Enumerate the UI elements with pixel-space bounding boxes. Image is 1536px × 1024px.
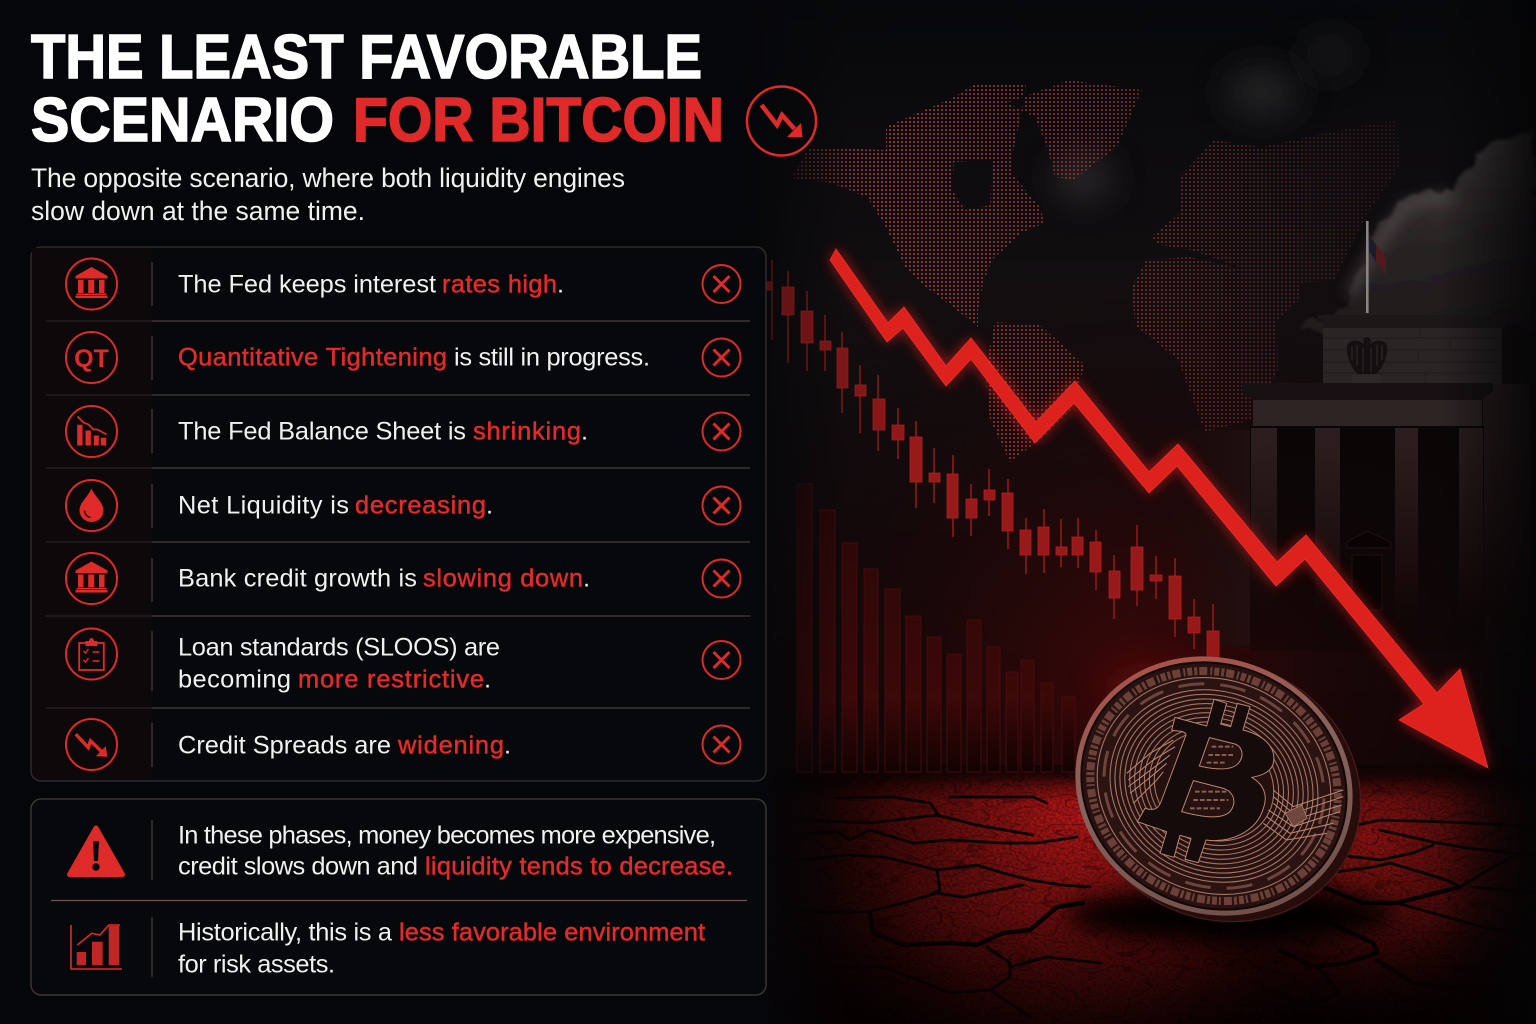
icon: title downward arrow xyxy=(747,86,816,156)
row: quantitative tightening: Quantitative Tightening xyxy=(178,344,447,372)
title line 2 white: SCENARIO xyxy=(31,86,334,155)
coin edge xyxy=(1038,615,1404,967)
row: credit spreads xyxy=(66,719,740,770)
coin shadow and glow xyxy=(1065,662,1395,943)
row: bank credit: slowing down xyxy=(423,564,583,592)
subtitle: slow down at the same time. xyxy=(31,196,365,226)
row: net liquidity: Net Liquidity is xyxy=(178,492,349,520)
title line 2 red: FOR BITCOIN xyxy=(353,86,724,155)
row: balance sheet: shrinking xyxy=(473,418,581,446)
note: money more expensive: In these phases, money becomes more expensive, xyxy=(178,822,716,850)
upper block xyxy=(1323,328,1502,384)
icon: bank xyxy=(66,258,117,310)
federal reserve building xyxy=(1170,221,1530,651)
bitcoin coin xyxy=(1033,611,1404,967)
dotted world map xyxy=(794,80,1400,462)
icon: x mark xyxy=(702,412,740,450)
concentric rings xyxy=(1052,631,1376,941)
row: loan standards: Loan standards (SLOOS) are xyxy=(178,634,500,662)
coin face xyxy=(1041,619,1387,953)
note: risk assets xyxy=(71,918,705,978)
row: rates high: The Fed keeps interest xyxy=(178,270,436,298)
bitcoin symbol xyxy=(1137,699,1274,863)
circuit traces xyxy=(1127,740,1343,840)
row: bank credit xyxy=(66,553,740,604)
note: money more expensive: liquidity tends to decrease. xyxy=(425,852,733,880)
storm clouds xyxy=(1300,130,1536,330)
icon: clipboard xyxy=(66,628,117,680)
icon column tint xyxy=(32,248,152,780)
row: balance sheet: The Fed Balance Sheet is xyxy=(178,418,466,446)
cracked ground xyxy=(770,765,1536,1024)
right wing xyxy=(1483,384,1530,644)
candlestick chart xyxy=(767,260,1219,660)
row: credit spreads: widening xyxy=(397,732,504,760)
note: money more expensive xyxy=(70,822,733,880)
row: quantitative tightening xyxy=(66,332,740,383)
icon: QT xyxy=(66,332,117,383)
flagpole xyxy=(1366,221,1369,313)
icon: bar chart xyxy=(71,925,122,969)
crack lines xyxy=(770,797,1536,1017)
row: rates high: . xyxy=(557,270,564,298)
lower cornice xyxy=(1242,383,1493,400)
columns xyxy=(1251,428,1483,650)
note: money more expensive: credit slows down and xyxy=(178,852,418,880)
note: risk assets: Historically, this is a xyxy=(178,918,393,946)
title xyxy=(31,23,724,155)
icon: x mark xyxy=(702,338,740,376)
icon: x mark xyxy=(702,560,740,598)
icon: x mark xyxy=(702,641,740,679)
row: loan standards xyxy=(66,628,740,694)
eagle xyxy=(1347,337,1387,383)
icon: water drop xyxy=(66,480,117,531)
title line 1: THE LEAST FAVORABLE xyxy=(31,23,702,92)
row: loan standards: . xyxy=(484,666,491,694)
row: loan standards: more restrictive xyxy=(298,666,484,694)
row: credit spreads: . xyxy=(504,732,511,760)
right edge vignette xyxy=(1440,0,1536,1024)
icon: QT: QT xyxy=(74,345,109,373)
row: net liquidity: decreasing xyxy=(355,492,486,520)
icon: x mark xyxy=(702,486,740,524)
icon: bank xyxy=(66,553,117,604)
note: risk assets: for risk assets. xyxy=(178,950,335,978)
fade towards panel xyxy=(740,0,850,1024)
ground red glow xyxy=(814,771,1509,1024)
row: bank credit: . xyxy=(583,564,590,592)
icon: shrinking bars xyxy=(66,406,117,457)
icon: warning triangle xyxy=(70,828,122,874)
row: loan standards: becoming xyxy=(178,666,291,694)
symbol counters xyxy=(1199,738,1242,769)
subtitle xyxy=(31,163,625,226)
panel: liquidity conditions xyxy=(31,247,766,781)
subtitle: The opposite scenario, where both liquidity engines xyxy=(31,163,625,193)
note: risk assets: less favorable environment xyxy=(399,918,705,946)
icon: x mark xyxy=(702,265,740,303)
icon: falling arrow xyxy=(66,719,117,770)
row: rates high: rates high xyxy=(442,270,557,298)
row: net liquidity xyxy=(66,480,740,531)
doorway pediment xyxy=(1347,531,1391,610)
colonnade gaps xyxy=(1250,426,1484,651)
masonry joints xyxy=(1323,328,1502,383)
row: credit spreads: Credit Spreads are xyxy=(178,732,391,760)
row dividers xyxy=(46,262,750,767)
dark sky backdrop xyxy=(740,0,1536,780)
circuit chip xyxy=(1285,805,1307,827)
left wing xyxy=(1170,430,1250,645)
american flag xyxy=(1369,235,1386,275)
declining volume bars xyxy=(797,484,1095,772)
entablature xyxy=(1253,398,1482,426)
row: rates high xyxy=(66,258,740,310)
falling red arrow xyxy=(830,249,1488,768)
coin rim xyxy=(1033,611,1395,961)
row: balance sheet xyxy=(66,406,740,457)
row: bank credit: Bank credit growth is xyxy=(178,564,417,592)
icon: x mark xyxy=(702,726,740,764)
row: net liquidity: . xyxy=(486,492,493,520)
roof cornice xyxy=(1318,315,1504,328)
row: balance sheet: . xyxy=(581,418,588,446)
panel: takeaway notes xyxy=(31,799,766,995)
row: quantitative tightening: is still in progress. xyxy=(454,344,650,372)
